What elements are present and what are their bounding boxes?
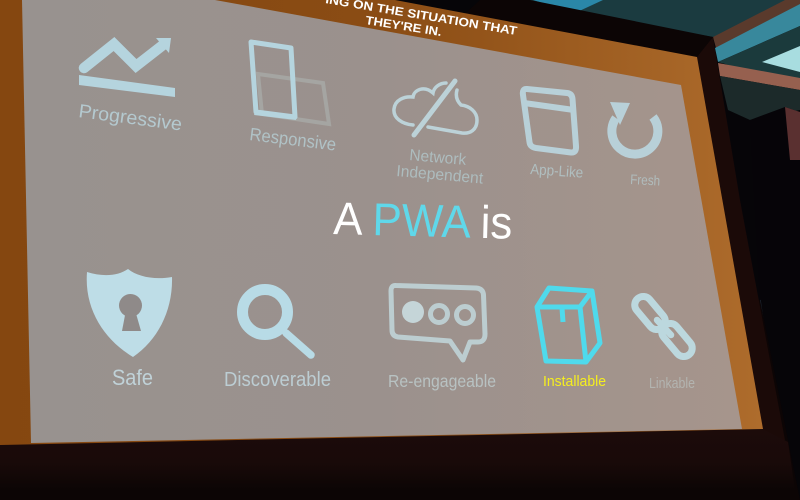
label: Discoverable: Discoverable [224, 369, 331, 391]
heading: A PWA is: A PWA is [333, 192, 513, 249]
right frame inner band [697, 37, 785, 440]
label: Installable: Installable [543, 373, 606, 390]
icon: linkable chain [631, 293, 696, 360]
label: Network Independent [396, 147, 484, 188]
icon: app-like window [523, 89, 576, 153]
icon: fresh arrow [610, 102, 658, 154]
label: Safe: Safe [112, 365, 153, 390]
label: Progressive: Progressive [77, 101, 183, 136]
icon: progressive [79, 38, 175, 97]
caption: THEY'RE IN. [365, 13, 443, 39]
slide panel [22, 0, 742, 443]
bottom frame band [0, 429, 795, 490]
label: Linkable: Linkable [649, 375, 695, 392]
label: Fresh: Fresh [630, 171, 661, 189]
icon: responsive [251, 42, 329, 124]
icon: magnifier [242, 290, 311, 355]
icon: shield [87, 269, 172, 357]
icon: re-engageable speech bubble [391, 285, 485, 360]
label: Responsive: Responsive [249, 124, 337, 155]
icon: network independent cloud [394, 81, 477, 135]
icon: installable box [537, 288, 600, 362]
label: Network Independent: Independent [396, 163, 484, 188]
label: Re-engageable: Re-engageable [388, 371, 496, 391]
label: App-Like: App-Like [530, 161, 584, 182]
label: Network Independent: Network [409, 147, 468, 169]
